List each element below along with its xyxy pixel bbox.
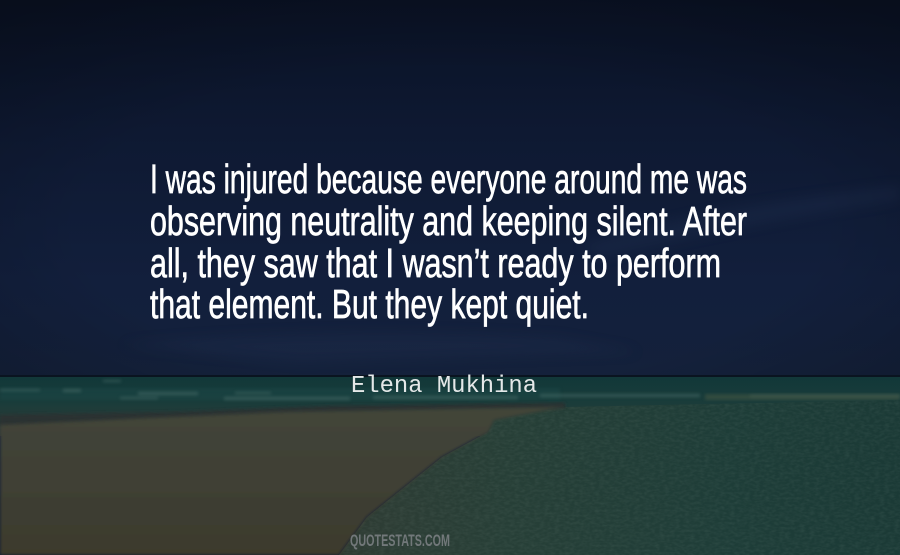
background: night sky [0, 0, 900, 378]
background: sand bar [0, 403, 565, 555]
background: horizon and distant sea [0, 375, 900, 436]
quote text [150, 156, 747, 327]
quote line 3: all, they saw that I wasn’t ready to perform [150, 240, 721, 286]
watermark: QUOTESTATS.COM [350, 531, 450, 550]
author name: Elena Mukhina [351, 373, 537, 400]
background: water foreground [330, 400, 900, 555]
quote line 4: that element. But they kept quiet. [150, 281, 589, 327]
